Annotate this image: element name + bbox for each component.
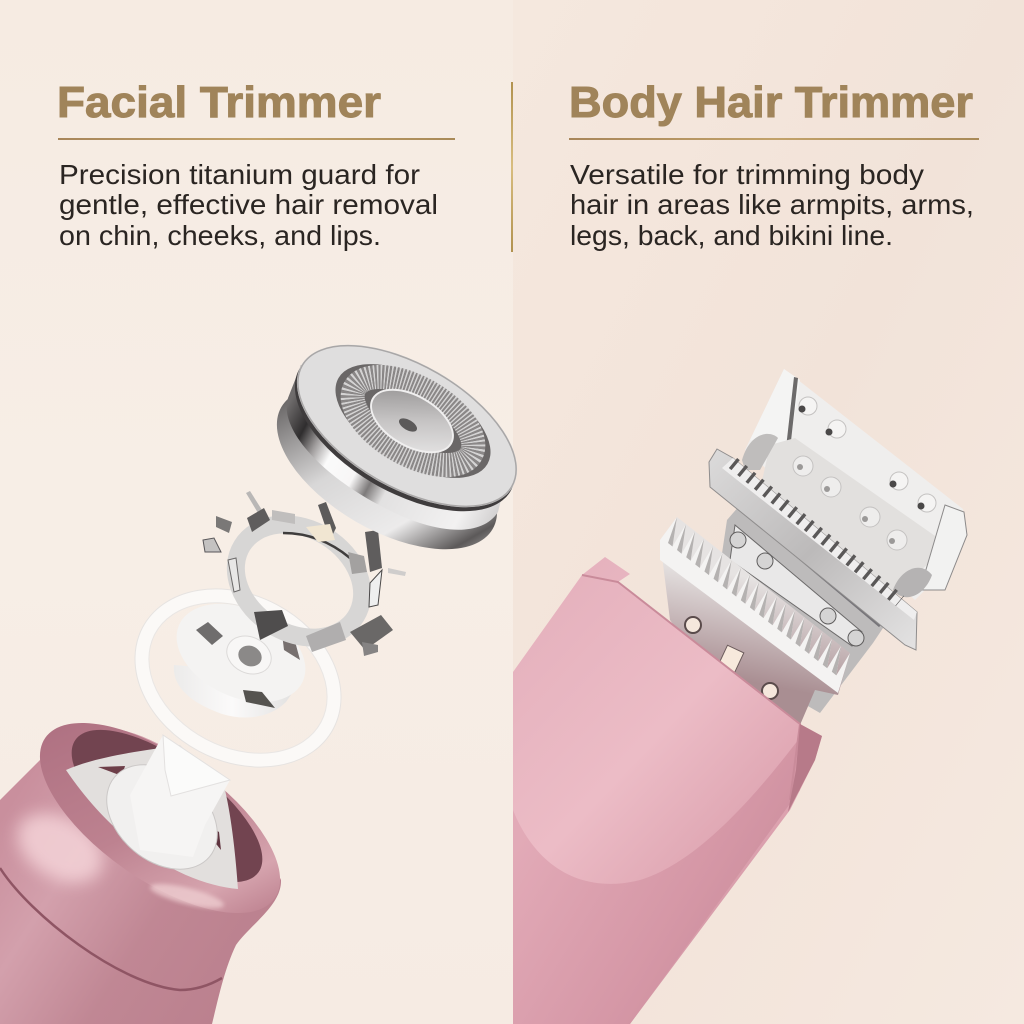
illustration: facial trimmer exploded view (0, 311, 544, 1024)
metal blade ring (203, 491, 406, 661)
white post (130, 735, 230, 857)
grill (317, 341, 509, 501)
pink body (513, 557, 822, 1024)
body lower shade (513, 735, 802, 1024)
heading rule right (569, 138, 979, 140)
description: body hair trimmer (570, 159, 974, 251)
tooth side facets (668, 517, 841, 675)
heading: Facial Trimmer: Facial Trimmer (57, 78, 381, 127)
description: facial trimmer (59, 159, 438, 251)
panel: facial trimmer text (57, 78, 455, 251)
illustration: body hair trimmer (513, 369, 967, 1024)
background right panel (513, 0, 1024, 1024)
pink handle (0, 687, 310, 1024)
handle groove (0, 868, 222, 990)
description: body hair trimmer: legs, back, and bikini line. (570, 220, 893, 251)
heading: Body Hair Trimmer: Body Hair Trimmer (569, 78, 973, 127)
hinged blade cover (742, 369, 967, 600)
lower comb blade (660, 517, 850, 725)
description: facial trimmer: on chin, cheeks, and lips. (59, 220, 381, 251)
panel: body hair trimmer text (569, 78, 979, 251)
description: facial trimmer: Precision titanium guard for (59, 159, 420, 190)
handle rim (10, 687, 310, 949)
background left panel (0, 0, 513, 1024)
description: facial trimmer: gentle, effective hair removal (59, 189, 438, 220)
clear outer ring (104, 554, 372, 802)
inner grey disc (66, 745, 238, 889)
white cup (161, 584, 321, 722)
body edge (582, 575, 800, 800)
silver shaver head (250, 311, 544, 583)
vertical gold divider (511, 82, 513, 252)
description: body hair trimmer: Versatile for trimming body (570, 159, 924, 190)
handle opening (49, 702, 285, 910)
upper comb bar (709, 449, 917, 650)
heading rule left (58, 138, 455, 140)
description: body hair trimmer: hair in areas like armpits, arms, (570, 189, 974, 220)
rear blade plate with screws (715, 505, 885, 713)
pegs (793, 397, 936, 550)
handle highlight (5, 799, 115, 897)
